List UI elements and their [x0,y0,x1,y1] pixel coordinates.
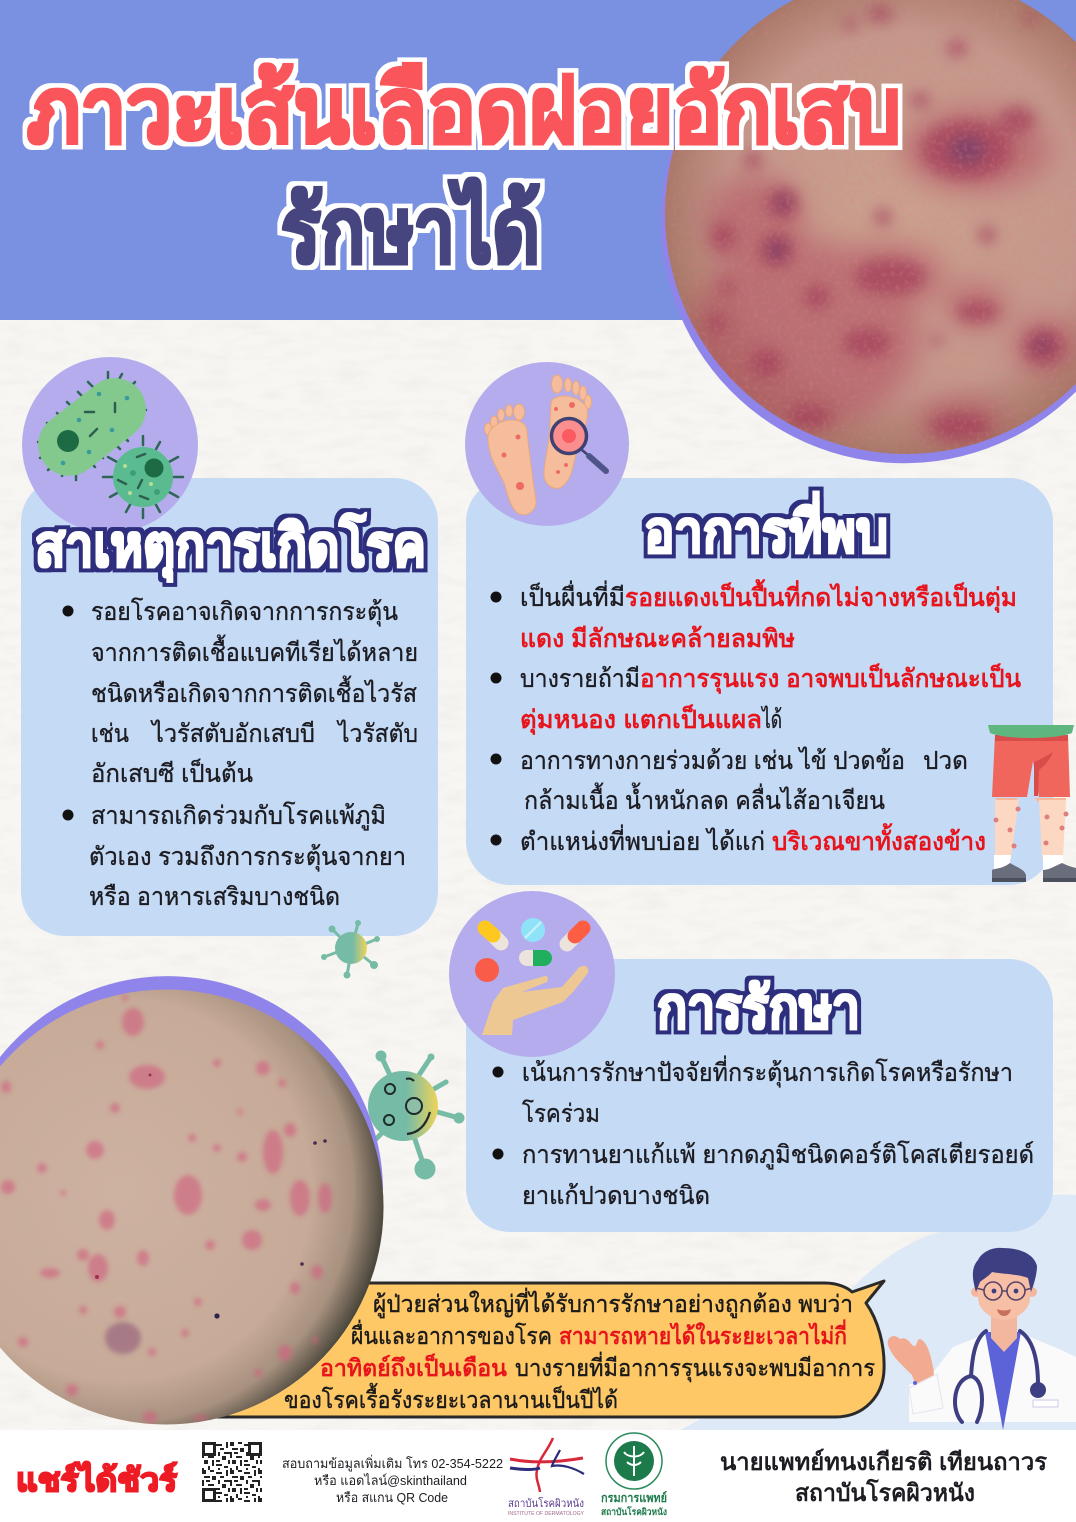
illustration: doctor [888,1248,1076,1430]
callout: speech bubble: ของโรคเรื้อรังระยะเวลานานเป็นปีได้ [284,1383,618,1413]
list: causes: จากการติดเชื้อแบคทีเรียได้หลาย [91,634,418,667]
list: causes: รอยโรคอาจเกิดจากการกระตุ้น [91,597,398,627]
list: symptoms: ตำแหน่งที่พบบ่อย ได้แก่ [520,824,765,856]
list: causes: ไวรัสตับ [336,719,418,748]
list: causes: อักเสบซี เป็นต้น [91,758,253,788]
list: treatment [492,1055,1034,1210]
panel: symptoms [465,362,1076,885]
panel: causes [21,357,438,936]
list: causes: ไวรัสตับอักเสบบี [150,719,315,748]
title [27,60,901,282]
list: causes: หรือ อาหารเสริมบางชนิด [89,883,340,911]
logo: institute of dermatology: สถาบันโรคผิวหนัง [508,1496,584,1510]
callout: speech bubble [200,1281,884,1417]
list: causes: ชนิดหรือเกิดจากการติดเชื้อไวรัส [91,675,417,708]
photo: rash skin bottom left [0,976,384,1424]
logo: institute of dermatology [508,1438,585,1517]
list: symptoms [490,579,1021,856]
footer band [0,1430,1076,1522]
heading: symptoms: อาการที่พบ [644,491,888,565]
panel: treatment [449,891,1053,1232]
list: symptoms: ปวด [923,747,968,775]
list: symptoms: ได้ [761,705,782,734]
list: symptoms: อาการรุนแรง อาจพบเป็นลักษณะเป็น [640,663,1021,694]
icon: bacteria [22,357,198,533]
icon: large virus with face [368,1051,464,1179]
list: causes [62,597,418,911]
list: treatment: ยาแก้ปวดบางชนิด [522,1182,710,1210]
logo text: share correct: แชร์ได้ชัวร์ [16,1461,177,1498]
light blue blob behind doctor [680,1194,1076,1430]
list: causes: สามารถเกิดร่วมกับโรคแพ้ภูมิ [91,801,386,831]
contact text: สอบถามข้อมูลเพิ่มเติม โทร 02-354-5222 [282,1455,503,1472]
contact text [282,1455,503,1505]
QR code [202,1442,262,1502]
heading: causes: สาเหตุการเกิดโรค [35,511,426,583]
author credit: นายแพทย์ทนงเกียรติ เทียนถาวร [720,1448,1047,1476]
list: symptoms: ตุ่มหนอง แตกเป็นแผล [520,704,762,735]
icon: feet with magnifier [465,362,629,526]
title: รักษาได้ [281,178,540,282]
list: symptoms: รอยแดงเป็นปื้นที่กดไม่จางหรือเป็นตุ่ม [625,579,1017,613]
list: causes: ตัวเอง รวมถึงการกระตุ้นจากยา [89,843,406,872]
photo: rash skin close-up top right [660,0,1076,463]
list: causes: เช่น [91,720,129,748]
author credit: สถาบันโรคผิวหนัง [795,1478,975,1507]
list: symptoms: อาการทางกายร่วมด้วย เช่น ไข้ ปวดข้อ [520,746,905,775]
list: treatment: เน้นการรักษาปัจจัยที่กระตุ้นการเกิดโรคหรือรักษา [522,1055,1013,1088]
callout: speech bubble: อาทิตย์ถึงเป็นเดือน [320,1353,507,1381]
callout: speech bubble: สามารถหายได้ในระยะเวลาไม่กี่ [559,1319,847,1349]
callout: speech bubble: ผื่นและอาการของโรค [351,1319,552,1349]
icon: pills over hand [449,891,615,1057]
icon: small virus [322,920,380,978]
logo: institute of dermatology: INSTITUTE OF DERMATOLOGY [508,1511,585,1517]
heading: treatment: การรักษา [657,976,860,1041]
list: treatment: การทานยาแก้แพ้ ยากดภูมิชนิดคอร์ติโคสเตียรอยด์ [522,1140,1034,1170]
list: symptoms: แดง มีลักษณะคล้ายลมพิษ [520,625,795,653]
logo: department of medical services [601,1433,667,1518]
contact text: หรือ สแกน QR Code [336,1490,448,1505]
list: symptoms: บริเวณขาทั้งสองข้าง [772,823,986,856]
author credit [720,1448,1047,1507]
logo: department of medical services: กรมการแพทย์ [601,1491,667,1505]
list: symptoms: บางรายถ้ามี [520,665,640,693]
callout: speech bubble: ผู้ป่วยส่วนใหญ่ที่ได้รับการรักษาอย่างถูกต้อง พบว่า [373,1287,853,1319]
list: symptoms: กล้ามเนื้อ น้ำหนักลด คลื่นไส้อาเจียน [524,782,885,815]
title: ภาวะเส้นเลือดฝอยอักเสบ [27,60,901,162]
header band [0,0,1076,320]
list: symptoms: เป็นผื่นที่มี [520,580,625,612]
list: treatment: โรคร่วม [522,1099,600,1128]
logo: department of medical services: สถาบันโรคผิวหนัง [601,1506,667,1518]
icon: legs with rash [988,725,1076,882]
contact text: หรือ แอดไลน์@skinthailand [314,1473,467,1488]
callout: speech bubble: บางรายที่มีอาการรุนแรงจะพบมีอาการ [515,1351,875,1382]
